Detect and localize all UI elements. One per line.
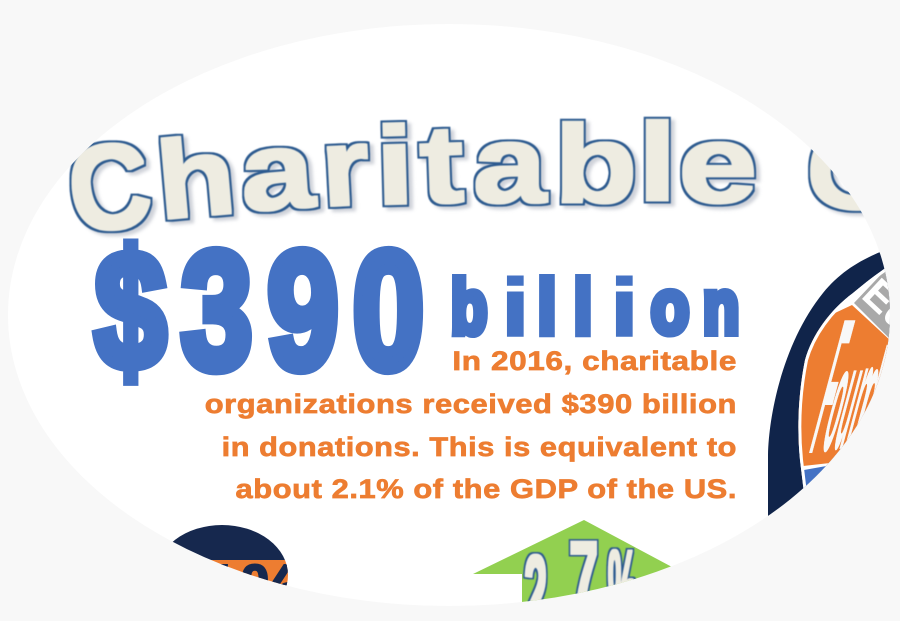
title: l (637, 101, 678, 224)
title: a (236, 106, 319, 234)
infographic canvas (68, 116, 890, 602)
pie chart: giving by recipient (768, 252, 890, 516)
arrow value (522, 538, 637, 602)
billion label: l (574, 264, 592, 349)
billion label: i (610, 262, 639, 354)
slice label (809, 320, 888, 453)
description text: In 2016, charitable (452, 347, 737, 376)
billion label: i (501, 262, 530, 354)
description text: in donations. This is equivalent to (222, 433, 737, 462)
title: h (151, 114, 240, 243)
green arrow with percentage (473, 520, 671, 602)
big amount: $390 (95, 217, 424, 404)
slice: education (854, 272, 890, 338)
slice label: d (845, 324, 897, 468)
title (68, 116, 864, 238)
pie slices (798, 268, 890, 488)
title: t (418, 102, 466, 227)
title: a (473, 102, 548, 226)
billion label: o (651, 264, 689, 349)
slice label: u (824, 317, 879, 479)
slice label: n (836, 315, 891, 477)
slice: blue (803, 466, 826, 488)
billion label: n (703, 265, 739, 350)
title: C (60, 114, 159, 260)
description text: organizations received $390 billion (205, 390, 737, 419)
billion label: l (538, 264, 556, 349)
title: i (373, 105, 416, 228)
title: b (554, 103, 637, 226)
billion label: b (451, 265, 487, 350)
clipped oval contents (60, 101, 900, 621)
slice: foundations (798, 305, 888, 466)
percentage badge (172, 525, 288, 586)
title: r (318, 104, 372, 230)
slice label: o (812, 319, 867, 481)
title: e (678, 104, 758, 226)
description text: about 2.1% of the GDP of the US. (236, 475, 737, 504)
navy ring (768, 252, 890, 516)
billion label (452, 274, 739, 338)
slice label: F (797, 279, 867, 493)
description text (205, 347, 737, 504)
